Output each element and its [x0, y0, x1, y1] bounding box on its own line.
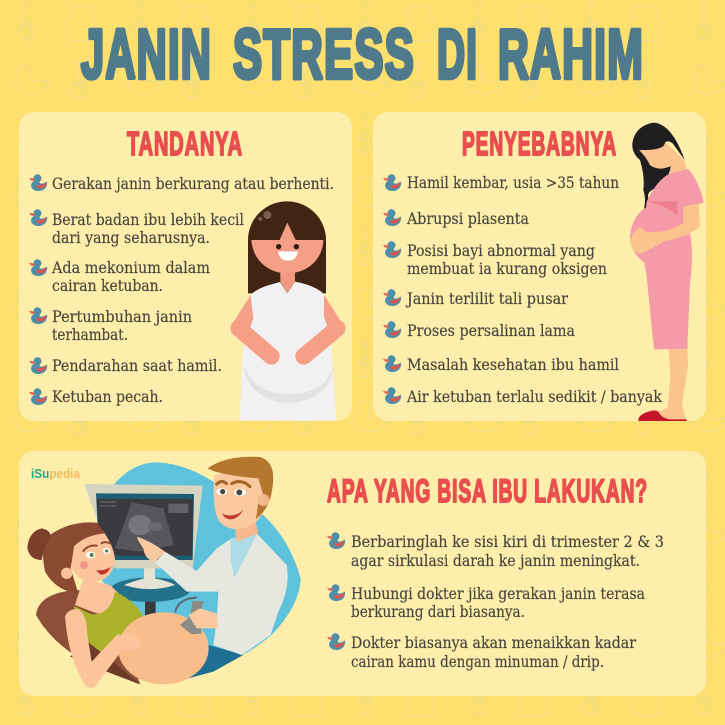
- list: tanda-tanda: Ketuban pecah.: [52, 388, 163, 406]
- probe and doctor hand: [175, 598, 218, 634]
- list: penyebab: Proses persalinan lama: [407, 322, 575, 340]
- pregnant patient: [27, 522, 209, 688]
- illustration: pregnant woman side: [630, 123, 704, 421]
- title: STRESS: [233, 15, 415, 93]
- list: tindakan: [327, 532, 664, 671]
- title: JANIN: [81, 15, 212, 93]
- list: penyebab: [383, 174, 663, 406]
- list: penyebab: Abrupsi plasenta: [406, 210, 529, 228]
- title: DI: [437, 15, 478, 93]
- illustration: ultrasound scene: [27, 457, 301, 688]
- list: penyebab: Posisi bayi abnormal yang: [407, 242, 595, 260]
- list: penyebab: membuat ia kurang oksigen: [407, 260, 607, 278]
- list: tanda-tanda: Pendarahan saat hamil.: [52, 357, 222, 375]
- panel: penyebabnya: [373, 112, 706, 421]
- illustration: pregnant woman front: [231, 201, 344, 421]
- list: tindakan: berkurang dari biasanya.: [351, 603, 525, 621]
- list: tanda-tanda: Gerakan janin berkurang atau berhenti.: [52, 175, 334, 193]
- list: penyebab: Hamil kembar, usia >35 tahun: [407, 174, 619, 192]
- logo: iSupedia: iSupedia: [31, 466, 81, 481]
- panel: apa yang bisa ibu lakukan: [19, 451, 706, 696]
- panel: tandanya: [19, 112, 352, 421]
- ultrasound monitor: [84, 484, 203, 617]
- list: tanda-tanda: Ada mekonium dalam: [51, 259, 210, 277]
- list: tanda-tanda: Pertumbuhan janin: [52, 308, 192, 326]
- list: tanda-tanda: cairan ketuban.: [52, 277, 163, 295]
- list: tindakan: Hubungi dokter jika gerakan janin terasa: [351, 585, 645, 603]
- list: penyebab: Janin terlilit tali pusar: [405, 290, 569, 308]
- list: tindakan: agar sirkulasi darah ke janin meningkat.: [351, 552, 640, 570]
- title: [81, 15, 644, 93]
- list: tanda-tanda: dari yang seharusnya.: [52, 229, 210, 247]
- list: penyebab: Masalah kesehatan ibu hamil: [407, 356, 619, 374]
- list: tanda-tanda: terhambat.: [52, 326, 128, 344]
- list: tanda-tanda: Berat badan ibu lebih kecil: [52, 211, 244, 229]
- list: tanda-tanda: [29, 174, 334, 406]
- doctor: [137, 457, 288, 678]
- list: tindakan: Berbaringlah ke sisi kiri di trimester 2 & 3: [351, 533, 664, 551]
- blue blob: [100, 462, 301, 678]
- list: tindakan: cairan kamu dengan minuman / drip.: [351, 653, 604, 671]
- heading: penyebabnya: PENYEBABNYA: [462, 125, 617, 162]
- heading: tandanya: TANDANYA: [127, 125, 243, 162]
- list: penyebab: Air ketuban terlalu sedikit / banyak: [406, 388, 663, 406]
- list: tindakan: Dokter biasanya akan menaikkan kadar: [351, 634, 637, 652]
